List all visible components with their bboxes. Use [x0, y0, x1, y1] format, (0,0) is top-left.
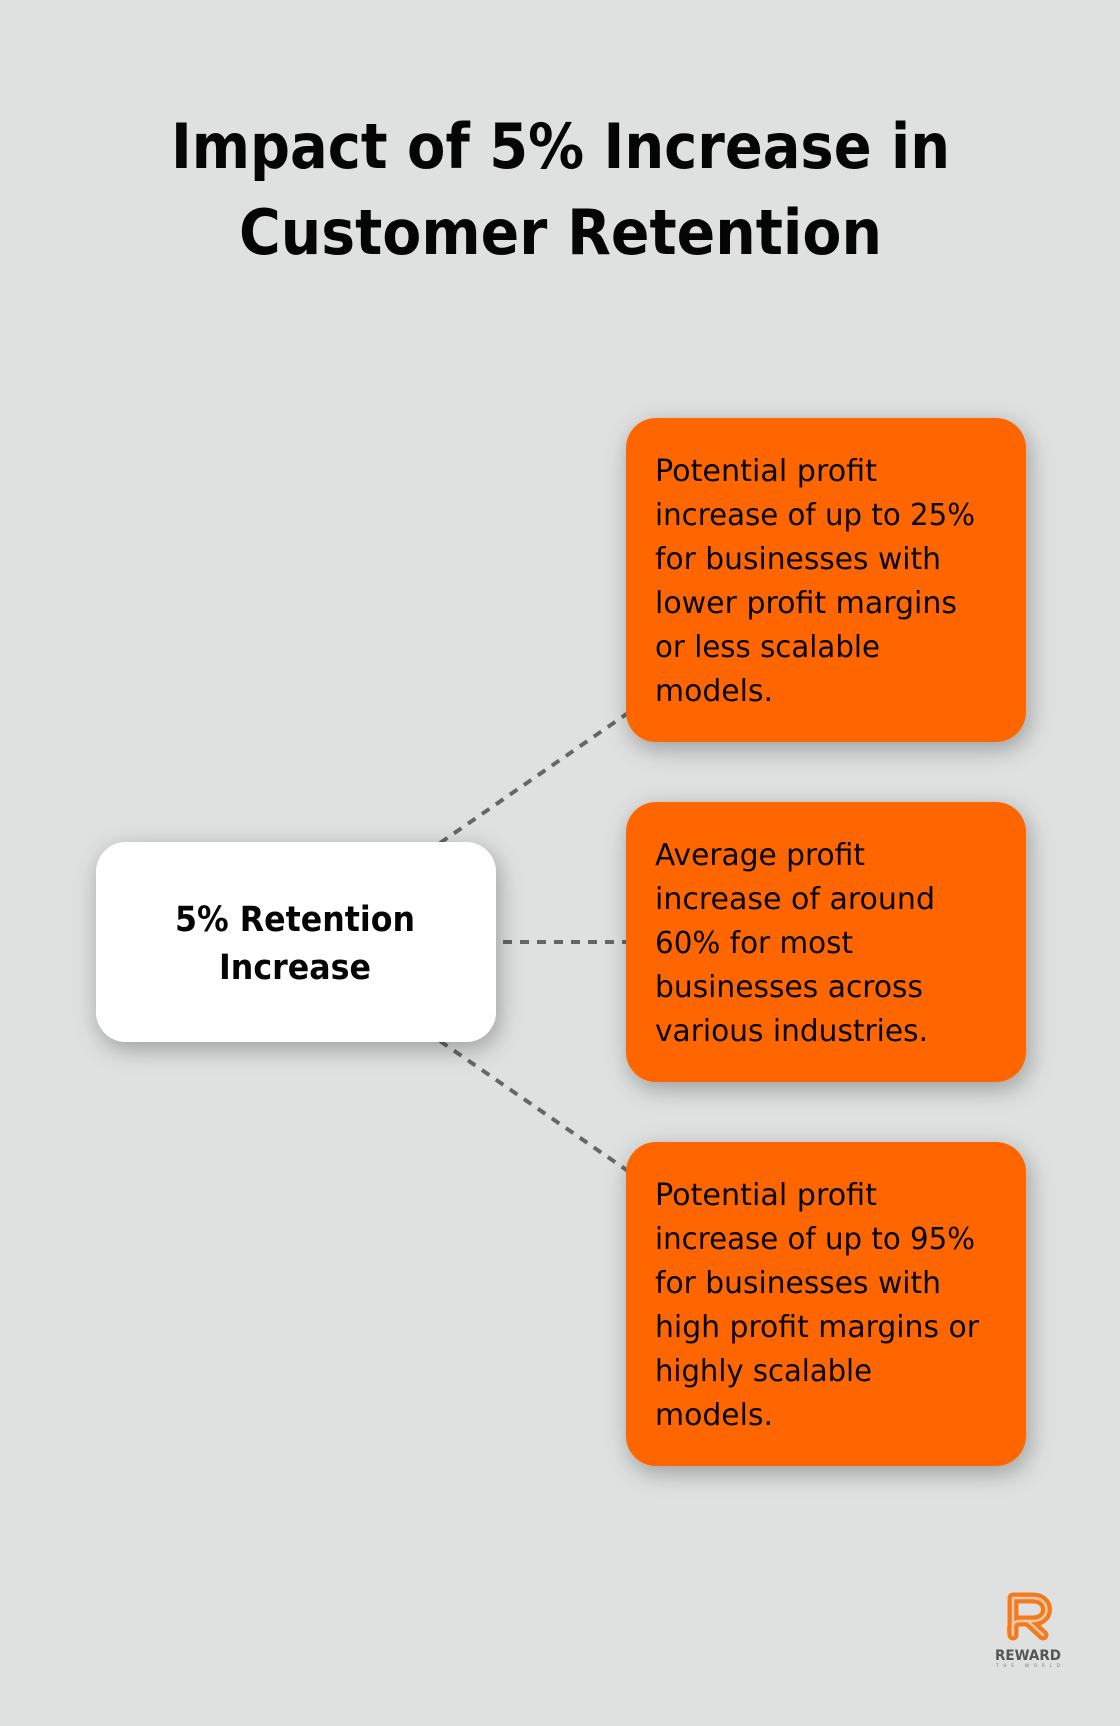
- panel: around 60% outcome: Average profit: [655, 838, 865, 873]
- panel: 5% retention increase: 5% Retention: [175, 900, 415, 940]
- title: Customer Retention: [239, 196, 882, 269]
- connector: retention to middle outcome: [503, 940, 626, 944]
- connector: retention to top outcome: [440, 713, 628, 843]
- panel: around 60% outcome: 60% for most: [655, 926, 853, 961]
- panel: around 60% outcome: increase of around: [655, 882, 935, 917]
- panel: up to 95% outcome: high profit margins or: [655, 1310, 979, 1345]
- panel: up to 25% outcome: Potential profit: [655, 454, 877, 489]
- connector: retention to bottom outcome: [440, 1041, 628, 1171]
- panel: up to 25% outcome: [626, 418, 1026, 742]
- panel: up to 25% outcome: lower profit margins: [655, 586, 957, 621]
- title: Impact of 5% Increase in: [171, 110, 950, 183]
- panel: up to 95% outcome: highly scalable: [655, 1354, 872, 1389]
- panel: up to 95% outcome: models.: [655, 1398, 773, 1433]
- logo: Reward the World: REWARD: [995, 1648, 1061, 1664]
- panel: 5% retention increase: Increase: [219, 948, 371, 988]
- panel: up to 95% outcome: for businesses with: [655, 1266, 941, 1301]
- panel: up to 95% outcome: Potential profit: [655, 1178, 877, 1213]
- panel: 5% retention increase: [96, 842, 496, 1042]
- panel: around 60% outcome: various industries.: [655, 1014, 928, 1049]
- panel: up to 25% outcome: increase of up to 25%: [655, 498, 975, 533]
- panel: up to 95% outcome: increase of up to 95%: [655, 1222, 975, 1257]
- title: [171, 110, 950, 269]
- panel: around 60% outcome: [626, 802, 1026, 1082]
- logo: Reward the World: THE WORLD: [995, 1663, 1060, 1668]
- logo: Reward the World: [995, 1598, 1061, 1668]
- icon: R mark: [1013, 1598, 1046, 1635]
- panel: up to 25% outcome: models.: [655, 674, 773, 709]
- panel: up to 95% outcome: [626, 1142, 1026, 1466]
- panel: around 60% outcome: businesses across: [655, 970, 923, 1005]
- panel: up to 25% outcome: or less scalable: [655, 630, 880, 665]
- panel: up to 25% outcome: for businesses with: [655, 542, 941, 577]
